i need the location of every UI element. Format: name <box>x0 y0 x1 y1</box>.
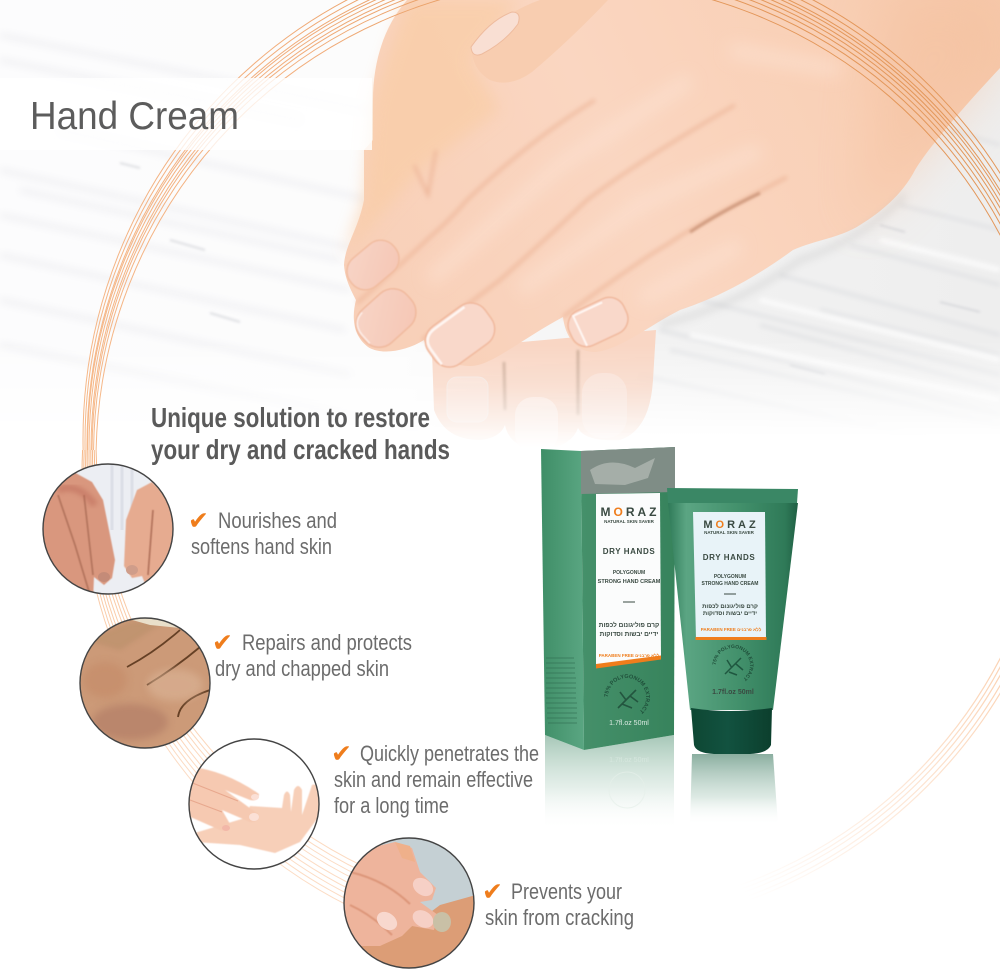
box label: POLYGONUM <box>613 570 645 576</box>
text: repairs: Repairs and protects <box>242 630 412 655</box>
product: box reflection: 1.7fl.oz 50ml <box>609 757 649 764</box>
main hand silhouette <box>344 0 1000 366</box>
text: prevents: skin from cracking <box>485 905 634 930</box>
text: penetrates: skin and remain effective <box>334 767 533 792</box>
white band behind title <box>0 78 372 150</box>
tube volume: 1.7fl.oz 50ml <box>712 689 754 696</box>
tube cap <box>691 708 772 754</box>
tube label <box>693 512 766 640</box>
box label: NATURAL SKIN SAVER <box>604 519 655 524</box>
tube crimp <box>667 488 798 503</box>
thumb <box>471 0 608 83</box>
finger separations <box>357 100 787 340</box>
finger highlights <box>430 50 840 300</box>
tube label: PARABEN FREE ללא פרבנים <box>701 627 762 632</box>
text: penetrates <box>331 739 539 818</box>
box label: STRONG HAND CREAM <box>598 579 661 585</box>
lower fingers fading out <box>432 330 656 436</box>
text: prevents: ✔ <box>482 877 503 906</box>
text: nourishes: Nourishes and <box>218 508 337 533</box>
back hand warm tone <box>345 0 520 255</box>
box front face <box>581 447 675 750</box>
box side face <box>541 449 584 750</box>
title: Hand Cream <box>30 95 239 138</box>
shadow under hand on table <box>660 195 905 325</box>
box volume: 1.7fl.oz 50ml <box>609 720 649 727</box>
wrist shading <box>860 0 1000 225</box>
box label <box>596 493 661 668</box>
text: prevents: Prevents your <box>511 879 622 904</box>
product: tube reflection <box>690 754 778 825</box>
box label: ידיים יבשות וסדוקות <box>600 631 658 638</box>
tube label: ידיים יבשות וסדוקות <box>703 611 757 617</box>
tube label: NATURAL SKIN SAVER <box>704 530 755 535</box>
product: tube <box>667 488 798 754</box>
tube body <box>668 503 798 710</box>
nail 4 <box>563 292 633 352</box>
text: repairs: ✔ <box>212 628 233 657</box>
text: penetrates: ✔ <box>331 739 352 768</box>
nail 2 <box>348 281 424 355</box>
text: prevents <box>482 877 634 930</box>
product: carton box <box>541 447 675 750</box>
text: penetrates: for a long time <box>334 793 449 818</box>
photo circle 3: applying cream <box>186 738 320 870</box>
photo circle 4: cream on skin <box>342 836 476 970</box>
text: penetrates: Quickly penetrates the <box>360 741 539 766</box>
text: nourishes: softens hand skin <box>191 534 332 559</box>
heading <box>151 402 450 465</box>
photo circle 2: chapped skin <box>78 616 212 750</box>
text: nourishes: ✔ <box>188 506 209 535</box>
background: white wood table <box>4 34 1000 402</box>
text: repairs: dry and chapped skin <box>215 656 389 681</box>
box seal: 75% POLYGONUM EXTRACT <box>604 674 650 714</box>
nail 1 <box>340 233 406 297</box>
text: nourishes <box>188 506 337 559</box>
tube label: MORAZ <box>703 519 759 531</box>
heading: Unique solution to restore <box>151 402 430 433</box>
product: box reflection <box>545 735 674 830</box>
tube label: DRY HANDS <box>703 553 755 562</box>
photo circle 1: dry hands <box>42 463 174 595</box>
box label: PARABEN FREE ללא פרבנים <box>599 653 660 658</box>
deep crease between fingers <box>690 193 760 232</box>
box label: MORAZ <box>600 505 660 519</box>
tube label: קרם פוליגונום לכפות <box>702 602 758 610</box>
box label: DRY HANDS <box>603 547 655 556</box>
tube seal: 75% POLYGONUM EXTRACT <box>712 644 754 682</box>
box label: קרם פוליגונום לכפות <box>599 621 659 629</box>
box fine print <box>546 658 577 723</box>
nail 3 <box>418 296 502 374</box>
tube label: STRONG HAND CREAM <box>702 581 758 587</box>
text: repairs <box>212 628 412 681</box>
photo: hands with manicured nails <box>340 0 1000 452</box>
heading: your dry and cracked hands <box>151 434 450 465</box>
tube label: POLYGONUM <box>714 574 746 580</box>
box photo strip <box>581 447 675 494</box>
thumb nail <box>471 12 519 55</box>
